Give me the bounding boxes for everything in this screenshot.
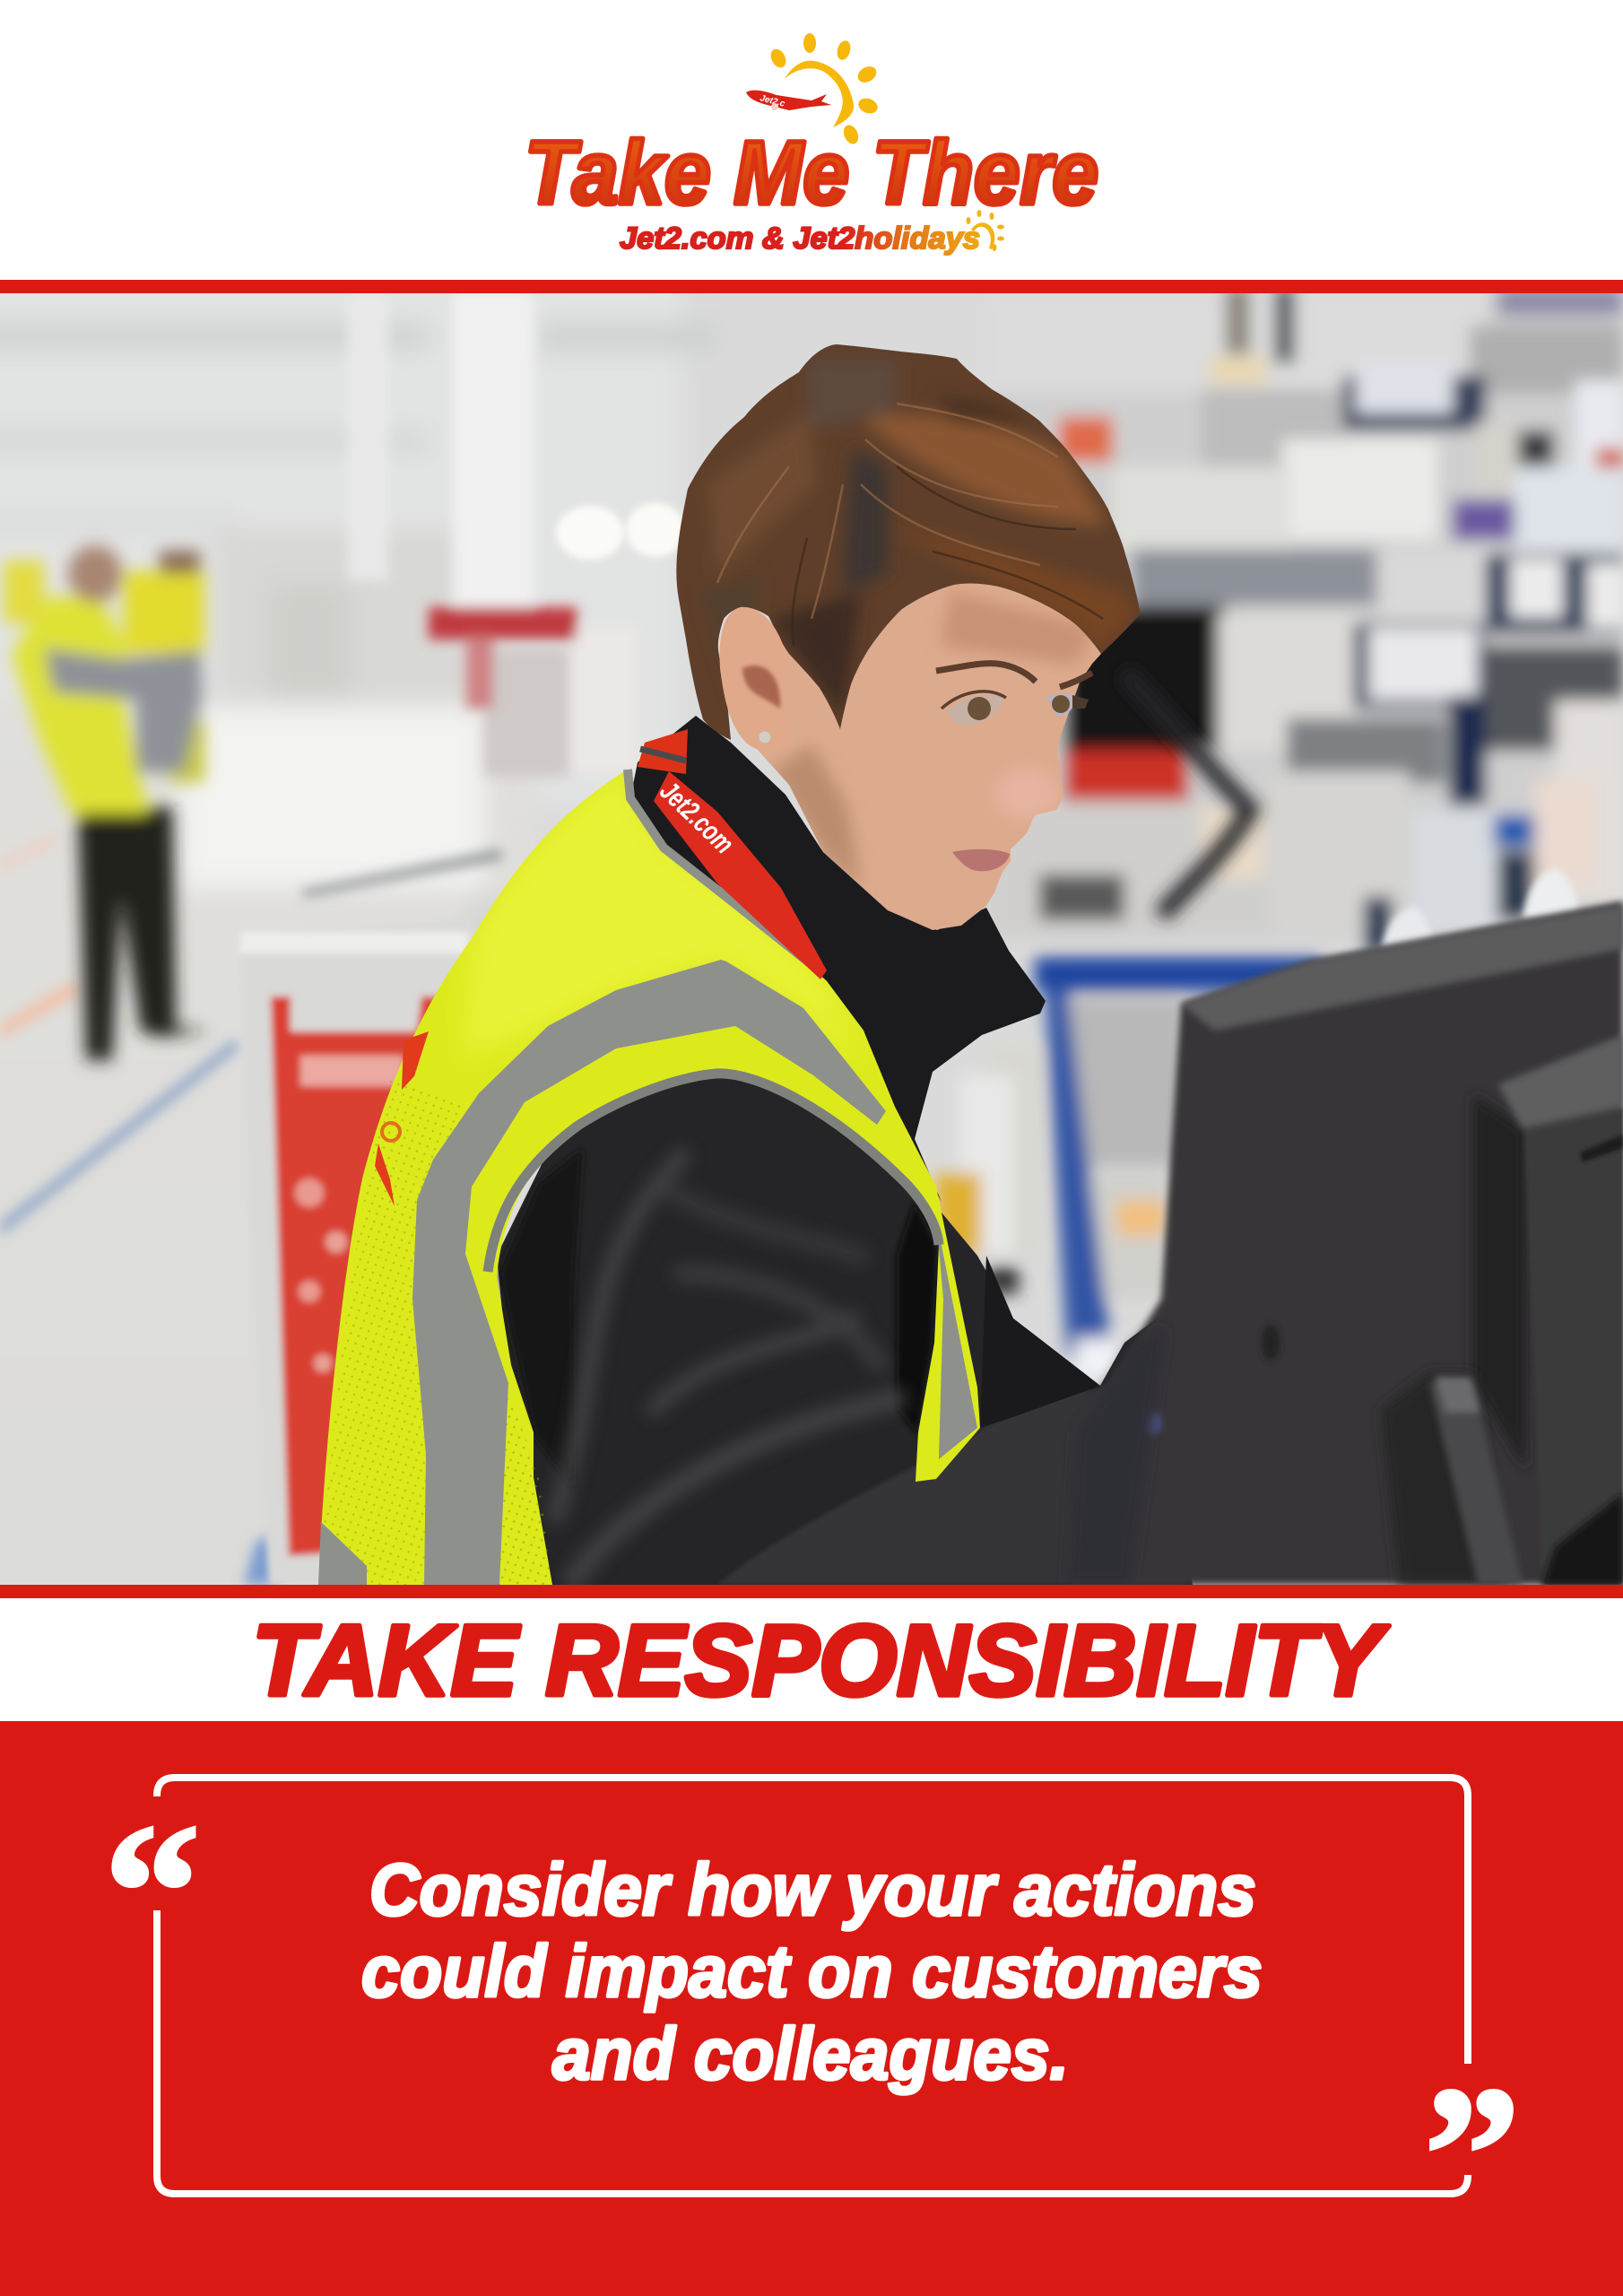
panel: red quote area <box>0 1721 1623 2296</box>
heading: TAKE RESPONSIBILITY <box>252 1605 1390 1717</box>
mouth <box>952 849 1010 871</box>
opening quote mark: “ <box>104 1784 201 1998</box>
closing quote mark: ” <box>1424 2047 1521 2261</box>
worker: collar <box>630 716 1046 1202</box>
logo strapline: Jet2.com & Jet2holidays <box>620 222 980 256</box>
photo: warehouse worker at a monitor <box>0 269 1623 1596</box>
logo title: Take Me There <box>525 123 1098 223</box>
eyes <box>942 691 1089 726</box>
eyebrows <box>936 664 1092 687</box>
quote text: and colleagues. <box>552 2013 1069 2095</box>
right shelving <box>936 287 1623 1378</box>
photo background: blurred warehouse <box>0 269 1623 1596</box>
icon: small sun <box>967 210 1004 251</box>
icon: sun <box>768 33 880 146</box>
worker: hair <box>676 344 1141 740</box>
worker: ear <box>719 606 783 750</box>
monitors <box>1067 901 1623 1585</box>
worker: jacket <box>497 1058 1193 1585</box>
quote text: could impact on customers <box>361 1931 1263 2013</box>
display stand <box>240 921 475 1585</box>
quote frame <box>157 1778 1468 2194</box>
top red rule <box>0 280 1623 293</box>
left colleagues in hi-vis <box>4 545 208 1060</box>
quote text <box>361 1849 1263 2095</box>
header: logo <box>525 33 1098 256</box>
heading band <box>0 1598 1623 1721</box>
vest reflective bands <box>318 960 977 1585</box>
worker: lanyard: Jet2.com <box>654 775 740 860</box>
quote text: Consider how your actions <box>369 1849 1256 1931</box>
worker: lanyard <box>638 729 827 979</box>
lower red rule <box>0 1585 1623 1598</box>
vest printed logo <box>375 1031 429 1206</box>
worker: hi-vis vest <box>318 770 980 1585</box>
icon: aeroplane: Jet2.c <box>759 93 786 109</box>
icon: aeroplane <box>746 91 831 110</box>
worker: neck and face <box>749 574 1101 930</box>
